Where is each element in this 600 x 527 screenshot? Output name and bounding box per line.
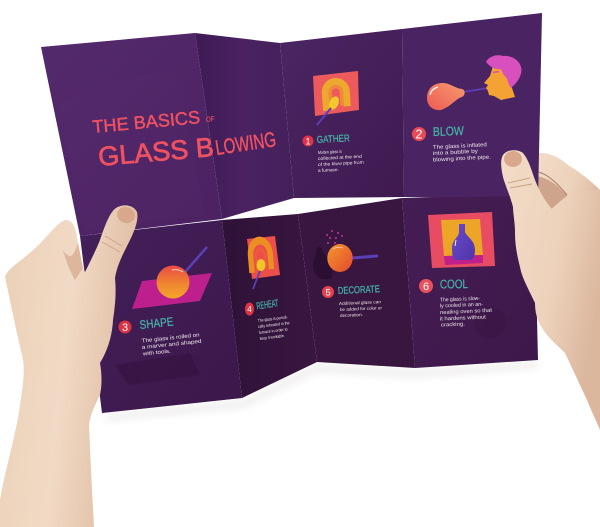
body: decorate: decoration. [340, 312, 363, 318]
number badge 3: 3 [122, 322, 128, 334]
body: cool: nealing oven so that [440, 308, 493, 316]
title [92, 107, 278, 172]
body: decorate: Additional glass can [339, 299, 382, 306]
body: decorate: be added for color or [340, 305, 383, 312]
panel: blow [402, 13, 542, 200]
body: reheat: furnace in order to [259, 326, 288, 335]
icon: furnace reheat [247, 236, 280, 289]
body: cool: The glass is slow- [440, 296, 480, 303]
body: gather: of the blow pipe from [318, 160, 364, 167]
panel: shape [80, 220, 242, 413]
step 4: reheat [245, 236, 290, 341]
body: reheat: keep it workable. [260, 333, 285, 341]
step 3: shape [118, 247, 212, 358]
heading: reheat: REHEAT [256, 298, 279, 312]
heading: gather: GATHER [317, 133, 350, 146]
body: blow: into a bubble by [433, 149, 478, 157]
hand: right holding leaflet [501, 150, 600, 430]
panel: reheat [222, 214, 317, 398]
step 2: blow [412, 55, 521, 163]
body: blow [433, 142, 491, 163]
body: gather: a furnace. [318, 167, 339, 173]
body: cool [440, 296, 493, 328]
icon: marver with glass ball [132, 247, 212, 309]
leaflet: folded paper [41, 13, 542, 413]
number badge 2: 2 [416, 128, 423, 142]
title word: of: OF [205, 114, 215, 124]
number badge 1: 1 [305, 136, 311, 146]
body: gather: collected at the end [318, 154, 363, 161]
step 5: decorate [313, 230, 383, 318]
step 6: cool [419, 212, 495, 328]
panel: decorate [298, 198, 415, 368]
panel: gather [280, 29, 404, 198]
panel: cool [402, 196, 538, 368]
body: shape: with tools. [141, 349, 171, 358]
icon: glass ball with color dots [313, 230, 377, 279]
number badge 4: 4 [247, 305, 252, 314]
hand: right fingers behind paper [536, 153, 600, 240]
number badge 5: 5 [325, 288, 331, 298]
title line: glass b: GLASS B [97, 132, 215, 172]
body: cool: it hardens without [440, 314, 487, 322]
icon: glass bubble and pipe [427, 83, 488, 110]
body: reheat: The glass is periodi- [258, 314, 288, 323]
panel: cover right [195, 33, 294, 219]
title line: lowing: LOWING [214, 128, 278, 160]
body: shape: a marver and shaped [142, 339, 202, 351]
body: blow: The glass is inflated [433, 142, 487, 151]
show-through shape on shape panel [115, 353, 200, 385]
body: decorate [339, 299, 383, 318]
number badge 6: 6 [423, 281, 429, 293]
title line: the basics: THE BASICS [92, 107, 201, 137]
heading: shape: SHAPE [139, 315, 174, 332]
body: gather: Molten glass is [318, 149, 343, 155]
step 1: gather [302, 71, 364, 173]
body: shape [141, 332, 202, 358]
body: cool: cracking. [441, 321, 465, 328]
panel: cover left [41, 33, 222, 236]
icon: furnace [313, 71, 359, 125]
show-through circle on cool panel [474, 307, 506, 339]
heading: blow: BLOW [433, 124, 464, 139]
heading: cool: COOL [440, 277, 468, 291]
paper drop shadow [104, 361, 538, 421]
body: reheat: cally reheated in the [258, 320, 290, 329]
body: blow: blowing into the pipe. [433, 154, 491, 163]
show-through shape on cover [58, 70, 205, 232]
icon: annealing oven with bottle [428, 212, 495, 268]
icon: glassblower head [484, 55, 521, 100]
hand: left holding leaflet [0, 204, 137, 527]
body: reheat [258, 314, 290, 341]
body: cool: ly cooled in an an- [440, 302, 483, 309]
body: shape: The glass is rolled on [142, 332, 200, 344]
heading: decorate: DECORATE [338, 284, 380, 297]
body: gather [318, 149, 364, 173]
